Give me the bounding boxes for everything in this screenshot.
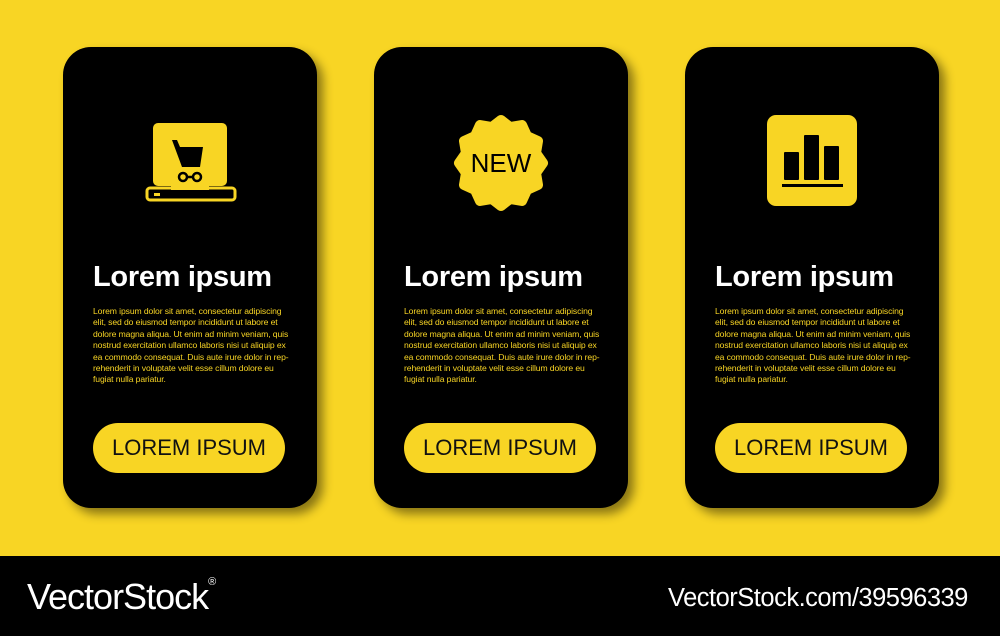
text block: Lorem ipsum dolor sit amet, consectetur adipiscing elit, sed do eiusmod tempor incididunt ut labore et dolore magna aliqua. Ut enim ad minim veniam, quis nostrud exercitation ullamco laboris nisi ut aliquip ex ea commodo consequat. Duis aute irure dolor in rep-rehenderit in voluptate velit esse cillum dolore eu fugiat nulla pariatur. [404,306,600,384]
text block: Lorem ipsum dolor sit amet, consectetur adipiscing elit, sed do eiusmod tempor incididunt ut labore et dolore magna aliqua. Ut enim ad minim veniam, quis nostrud exercitation ullamco laboris nisi ut aliquip ex ea commodo consequat. Duis aute irure dolor in rep-rehenderit in voluptate velit esse cillum dolore eu fugiat nulla pariatur. [93,306,289,384]
button [404,423,596,473]
icon: laptop with cart [146,123,236,202]
footer bar [0,556,1000,636]
panel: card 1 [63,47,317,508]
panel: card 3 [685,47,939,508]
footer logo: VectorStock® [27,576,215,617]
heading: Lorem ipsum [93,261,272,293]
button [715,423,907,473]
button: LOREM IPSUM [112,435,266,460]
icon: new badge: NEW [471,148,532,178]
button [93,423,285,473]
heading: Lorem ipsum [404,261,583,293]
footer url: VectorStock.com/39596339 [668,584,968,612]
panel: card 2 [374,47,628,508]
heading: Lorem ipsum [715,261,894,293]
button: LOREM IPSUM [734,435,888,460]
icon: bar chart [767,115,857,206]
button: LOREM IPSUM [423,435,577,460]
text block: Lorem ipsum dolor sit amet, consectetur adipiscing elit, sed do eiusmod tempor incididunt ut labore et dolore magna aliqua. Ut enim ad minim veniam, quis nostrud exercitation ullamco laboris nisi ut aliquip ex ea commodo consequat. Duis aute irure dolor in rep-rehenderit in voluptate velit esse cillum dolore eu fugiat nulla pariatur. [715,306,911,384]
icon: new badge [454,115,548,211]
